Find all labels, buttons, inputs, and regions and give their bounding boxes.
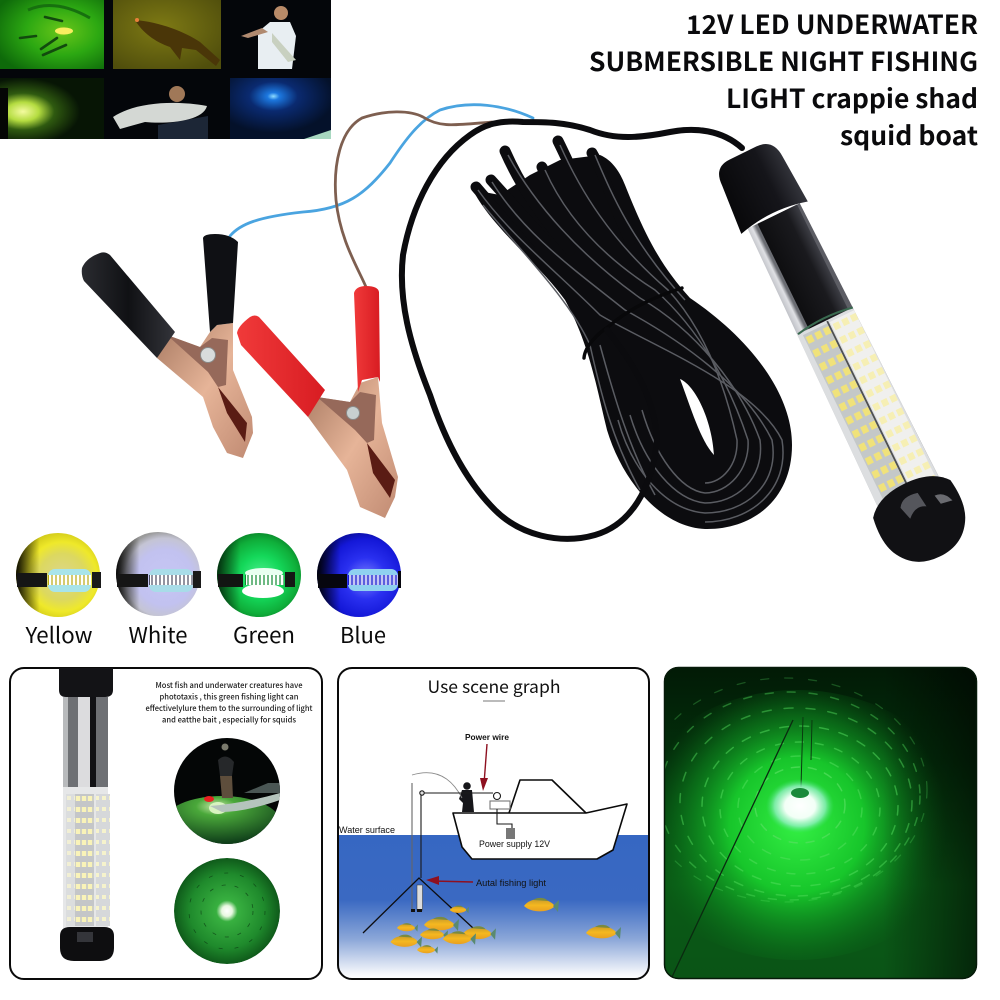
bottom cap	[864, 464, 980, 576]
fish swirl	[643, 678, 927, 902]
arrow: fishing light	[426, 876, 473, 885]
photo: man holding a bass	[241, 6, 296, 69]
product light, vertical	[59, 668, 114, 961]
green option	[217, 533, 301, 650]
tube	[743, 201, 938, 506]
long black cable loop	[402, 122, 742, 539]
title: LIGHT crappie shad	[726, 79, 978, 116]
blue and brown wires	[230, 105, 533, 287]
fish school	[390, 898, 621, 954]
yellow option: Yellow	[24, 618, 93, 650]
LED fishing light	[703, 134, 980, 576]
phototaxis text: and eatthe bait , especially for squids	[162, 714, 296, 726]
submerged lamp glow	[766, 779, 834, 833]
phototaxis text	[146, 680, 312, 726]
fishing rod	[412, 773, 462, 798]
scene heading: Use scene graph	[428, 673, 560, 698]
miniature light	[411, 885, 422, 912]
scene labels	[339, 732, 551, 888]
title: SUBMERSIBLE NIGHT FISHING	[589, 42, 978, 79]
boat	[453, 780, 627, 859]
cable tie	[584, 288, 682, 358]
black alligator clip	[82, 234, 253, 458]
title: squid boat	[840, 116, 978, 153]
colour options	[16, 532, 401, 650]
panel: green light attracting fish	[664, 667, 977, 979]
coiled black cable	[473, 141, 792, 529]
panel: phototaxis	[10, 668, 322, 979]
title	[589, 5, 978, 153]
panel frame	[664, 668, 976, 978]
LED panels	[793, 303, 939, 508]
battery	[506, 828, 515, 839]
green option: Green	[233, 618, 295, 650]
title: 12V LED UNDERWATER	[686, 5, 978, 42]
red alligator clip	[237, 286, 398, 518]
top cap	[710, 137, 808, 234]
phototaxis text: phototaxis , this green fishing light can	[160, 692, 299, 702]
panel: use scene graph	[338, 668, 649, 979]
scene labels: Water surface	[339, 825, 395, 835]
scene labels: Power wire	[465, 732, 509, 742]
photo collage: night fishing	[0, 0, 331, 139]
phototaxis text: effectivelylure them to the surrounding of light	[146, 703, 312, 714]
blue option	[317, 533, 401, 650]
yellow option	[16, 533, 101, 650]
photo: light glow in dark water	[0, 78, 104, 139]
arrow: power wire	[480, 744, 488, 791]
rigging and power wire	[412, 783, 512, 910]
photo: green light with fish	[0, 0, 104, 69]
cord and lamp wires	[672, 717, 812, 977]
scene labels: Autal fishing light	[476, 878, 547, 888]
scene labels: Power supply 12V	[479, 839, 551, 850]
blue option: Blue	[340, 618, 386, 650]
photo: man holding a large fish	[113, 86, 208, 139]
white option	[116, 532, 201, 650]
tripod frame	[363, 878, 473, 933]
photo: blue light	[230, 78, 331, 139]
phototaxis text: Most fish and underwater creatures have	[156, 680, 302, 691]
white option: White	[128, 618, 188, 650]
circle photo: angler on boat	[174, 738, 280, 844]
photo: tarpon under yellow light	[113, 0, 221, 69]
water	[338, 835, 649, 979]
fisherman	[459, 782, 474, 812]
circle photo: fish around light	[174, 858, 280, 964]
dark core	[758, 205, 849, 330]
